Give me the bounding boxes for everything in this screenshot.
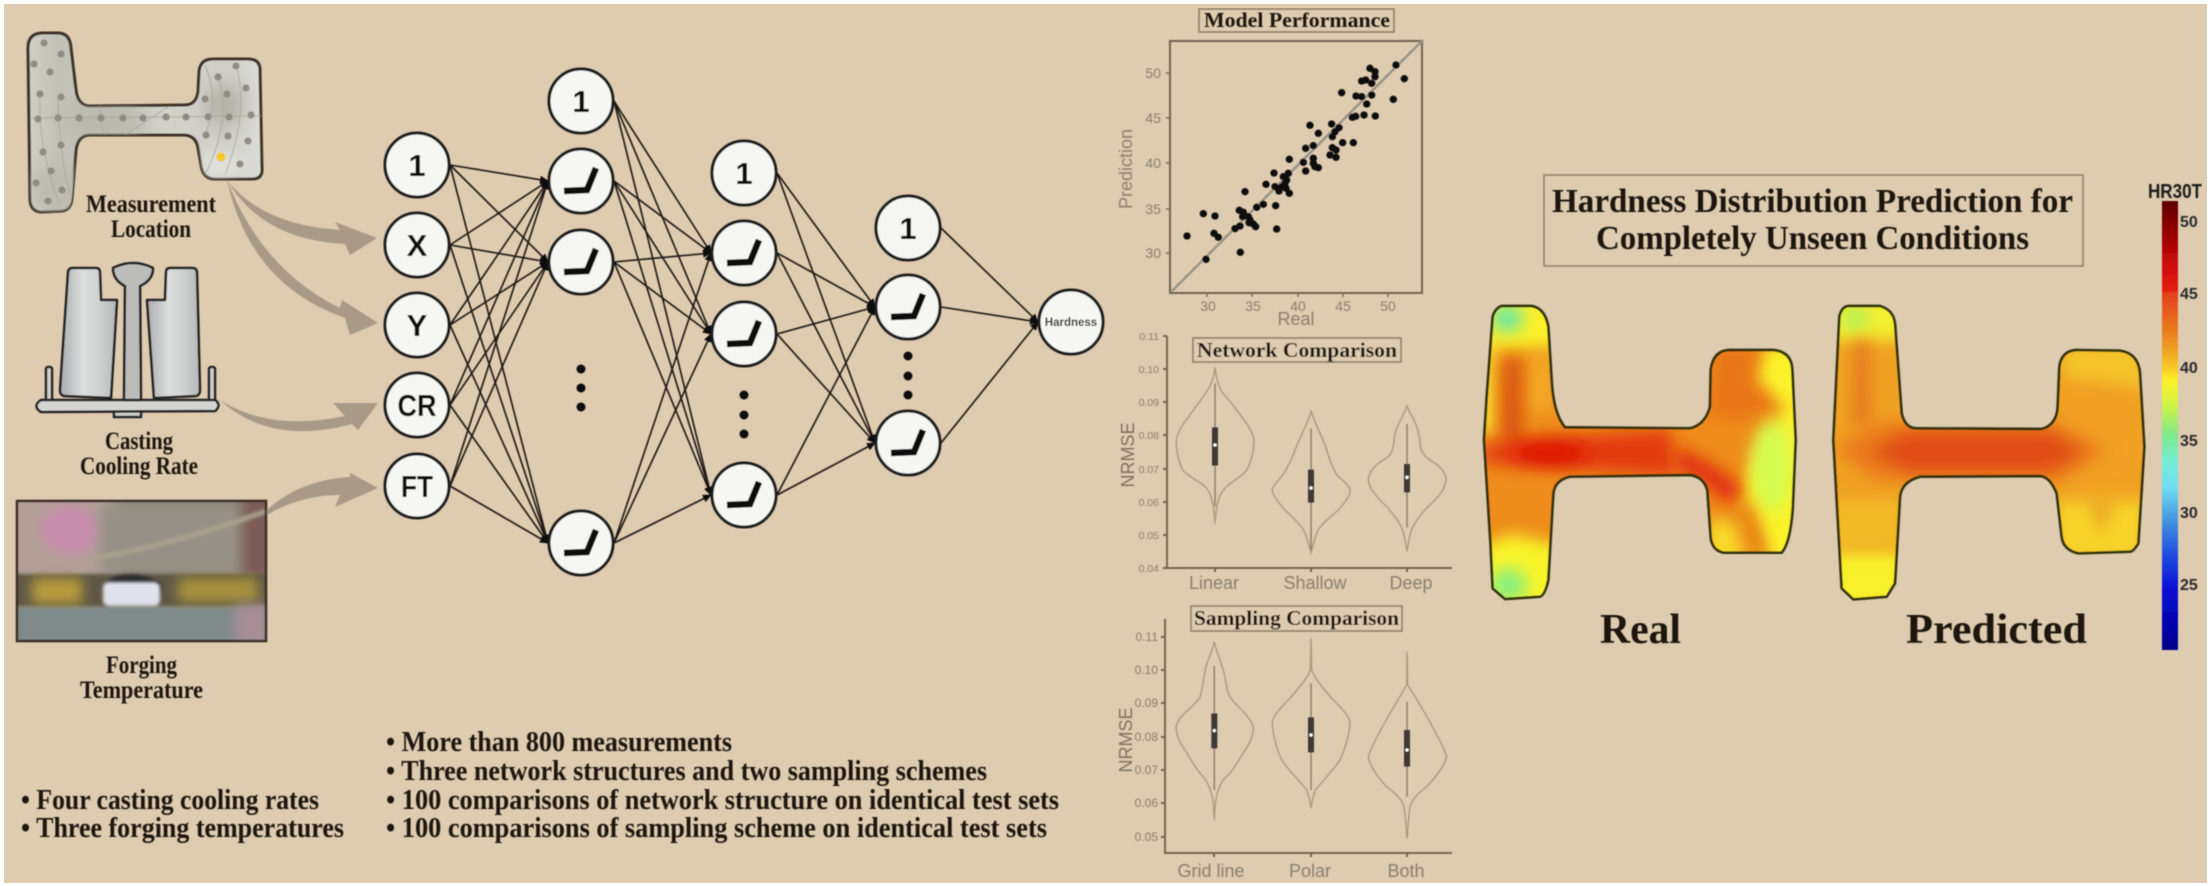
hidden layer 2 nodes: 1 [735, 156, 753, 191]
text block: data conditions [21, 785, 344, 844]
heading: hardness distribution prediction [1544, 175, 2083, 266]
color bar legend: HR30T: HR30T [2148, 181, 2202, 203]
label: casting cooling rate: Cooling Rate [80, 453, 198, 480]
input layer nodes [385, 133, 449, 518]
text block: experiment summary [386, 727, 1059, 844]
heading: hardness distribution prediction: Hardness Distribution Prediction for [1552, 183, 2073, 220]
hidden layer 3 nodes: 1 [899, 211, 917, 246]
axis labels: 0.09 [1135, 696, 1158, 710]
text block: experiment summary: • 100 comparisons of sampling scheme on identical test sets [386, 813, 1047, 844]
color bar legend: HR30T: 50 [2180, 214, 2198, 231]
axis labels: NRMSE [1118, 422, 1138, 488]
panel: network comparison violin chart [1118, 331, 1452, 593]
input layer nodes: CR [398, 388, 436, 423]
text block: experiment summary: • Three network structures and two sampling schemes [386, 756, 987, 787]
measurement points [30, 39, 255, 205]
plot frame and axes: 30 [1145, 245, 1161, 261]
axis labels: Polar [1289, 861, 1331, 881]
heading: model performance: Model Performance [1204, 8, 1390, 32]
casting illustration [36, 263, 218, 417]
axis labels: 0.11 [1136, 630, 1158, 644]
heading: sampling comparison: Sampling Comparison [1194, 606, 1399, 630]
axis labels: 0.07 [1139, 464, 1159, 476]
axis labels: 0.10 [1139, 364, 1159, 376]
axis labels [1116, 630, 1425, 881]
violins [1176, 638, 1447, 838]
heading: network comparison: Network Comparison [1197, 338, 1397, 362]
axis labels: 0.04 [1139, 563, 1159, 575]
plot frame and axes: 40 [1145, 155, 1161, 171]
network connections [450, 101, 1038, 543]
predicted heat fill [1834, 306, 2144, 599]
plot frame and axes: 50 [1380, 298, 1396, 314]
panel: measurement location specimen [28, 33, 262, 243]
scatter points [1183, 61, 1408, 263]
predicted outline [1833, 306, 2144, 599]
label: real: Real [1600, 607, 1681, 653]
label: measurement location: Measurement [86, 191, 217, 218]
axis labels [1118, 331, 1433, 593]
label: forging temperature: Temperature [80, 677, 203, 704]
heat map: real hardness distribution [1482, 304, 1798, 602]
label: measurement location [86, 191, 217, 243]
label: predicted: Predicted [1906, 607, 2087, 653]
input layer nodes: Y [407, 308, 428, 343]
specimen shading [30, 65, 262, 215]
axis labels: 0.08 [1135, 730, 1158, 744]
forging photo [18, 502, 266, 640]
hidden layer 2 nodes [712, 141, 776, 527]
hidden layer 1 nodes: 1 [572, 84, 590, 119]
text block: data conditions: • Four casting cooling rates [21, 785, 319, 816]
heading: hardness distribution prediction: Completely Unseen Conditions [1596, 220, 2029, 257]
plot frame and axes: Prediction [1116, 129, 1136, 209]
plot frame and axes: 35 [1245, 298, 1261, 314]
axis labels: Linear [1189, 573, 1239, 593]
arrow: measurement location to X [227, 180, 377, 255]
output node: hardness: Hardness [1045, 317, 1097, 329]
axis labels: 0.09 [1139, 397, 1159, 409]
label: forging temperature [80, 652, 203, 704]
input layer nodes: 1 [408, 148, 426, 183]
panel: sampling comparison violin chart [1116, 606, 1452, 881]
hidden layer 1 nodes [549, 69, 613, 575]
axis labels: 0.11 [1139, 331, 1159, 343]
axis labels: 0.10 [1135, 663, 1158, 677]
axes [1161, 619, 1452, 857]
arrow: forging to FT [267, 473, 378, 515]
axis labels: 0.08 [1139, 430, 1159, 442]
axis labels: Grid line [1177, 861, 1245, 881]
axis labels: Shallow [1283, 573, 1348, 593]
neural network diagram [385, 69, 1103, 575]
input layer nodes: X [407, 228, 428, 263]
plot frame and axes: 50 [1145, 65, 1161, 81]
input layer nodes: FT [401, 469, 433, 504]
photo frame [17, 501, 266, 641]
panel: forging temperature [5, 490, 275, 704]
label: casting cooling rate: Casting [105, 428, 173, 455]
plot frame and axes: 40 [1290, 298, 1306, 314]
color bar legend: HR30T: 25 [2180, 577, 2198, 594]
text block: experiment summary: • More than 800 measurements [386, 727, 732, 758]
axes [1163, 336, 1452, 572]
axis labels: Deep [1389, 573, 1433, 593]
axis labels: 0.06 [1135, 796, 1158, 810]
plot frame and axes: Real [1277, 309, 1315, 329]
axis labels: 0.06 [1139, 497, 1159, 509]
plot frame and axes [1116, 41, 1422, 329]
plot frame and axes: 45 [1145, 110, 1161, 126]
plot frame and axes: 45 [1335, 298, 1351, 314]
arrow: casting to CR [220, 400, 378, 431]
plot frame and axes: 35 [1145, 201, 1161, 217]
color bar legend: HR30T [2148, 181, 2202, 650]
text block: experiment summary: • 100 comparisons of network structure on identical test sets [386, 785, 1059, 816]
axis labels: 0.05 [1135, 830, 1158, 844]
specimen outline [28, 33, 262, 212]
label: measurement location: Location [111, 216, 191, 243]
real heat fill [1484, 306, 1796, 598]
violins [1176, 367, 1446, 553]
output node: hardness [1039, 290, 1103, 354]
label: casting cooling rate [80, 428, 198, 480]
heat map: predicted hardness distribution [1831, 304, 2146, 602]
color bar legend: HR30T: 30 [2180, 505, 2198, 522]
real outline [1484, 306, 1796, 599]
axis labels: 0.05 [1139, 530, 1159, 542]
panel: casting cooling rate [36, 263, 218, 480]
color bar legend: HR30T: 35 [2180, 433, 2198, 450]
color bar legend: HR30T: 45 [2180, 286, 2198, 303]
color bar legend: HR30T: 40 [2180, 360, 2198, 377]
axis labels: NRMSE [1116, 707, 1136, 773]
axis labels: Both [1387, 861, 1425, 881]
text block: data conditions: • Three forging temperatures [21, 813, 344, 844]
plot frame and axes: 30 [1200, 298, 1216, 314]
arrow: measurement location to Y [227, 180, 378, 335]
label: forging temperature: Forging [106, 652, 177, 679]
axis labels: 0.07 [1135, 763, 1158, 777]
hidden layer 3 nodes [876, 196, 940, 475]
panel: model performance scatter [1116, 8, 1422, 329]
